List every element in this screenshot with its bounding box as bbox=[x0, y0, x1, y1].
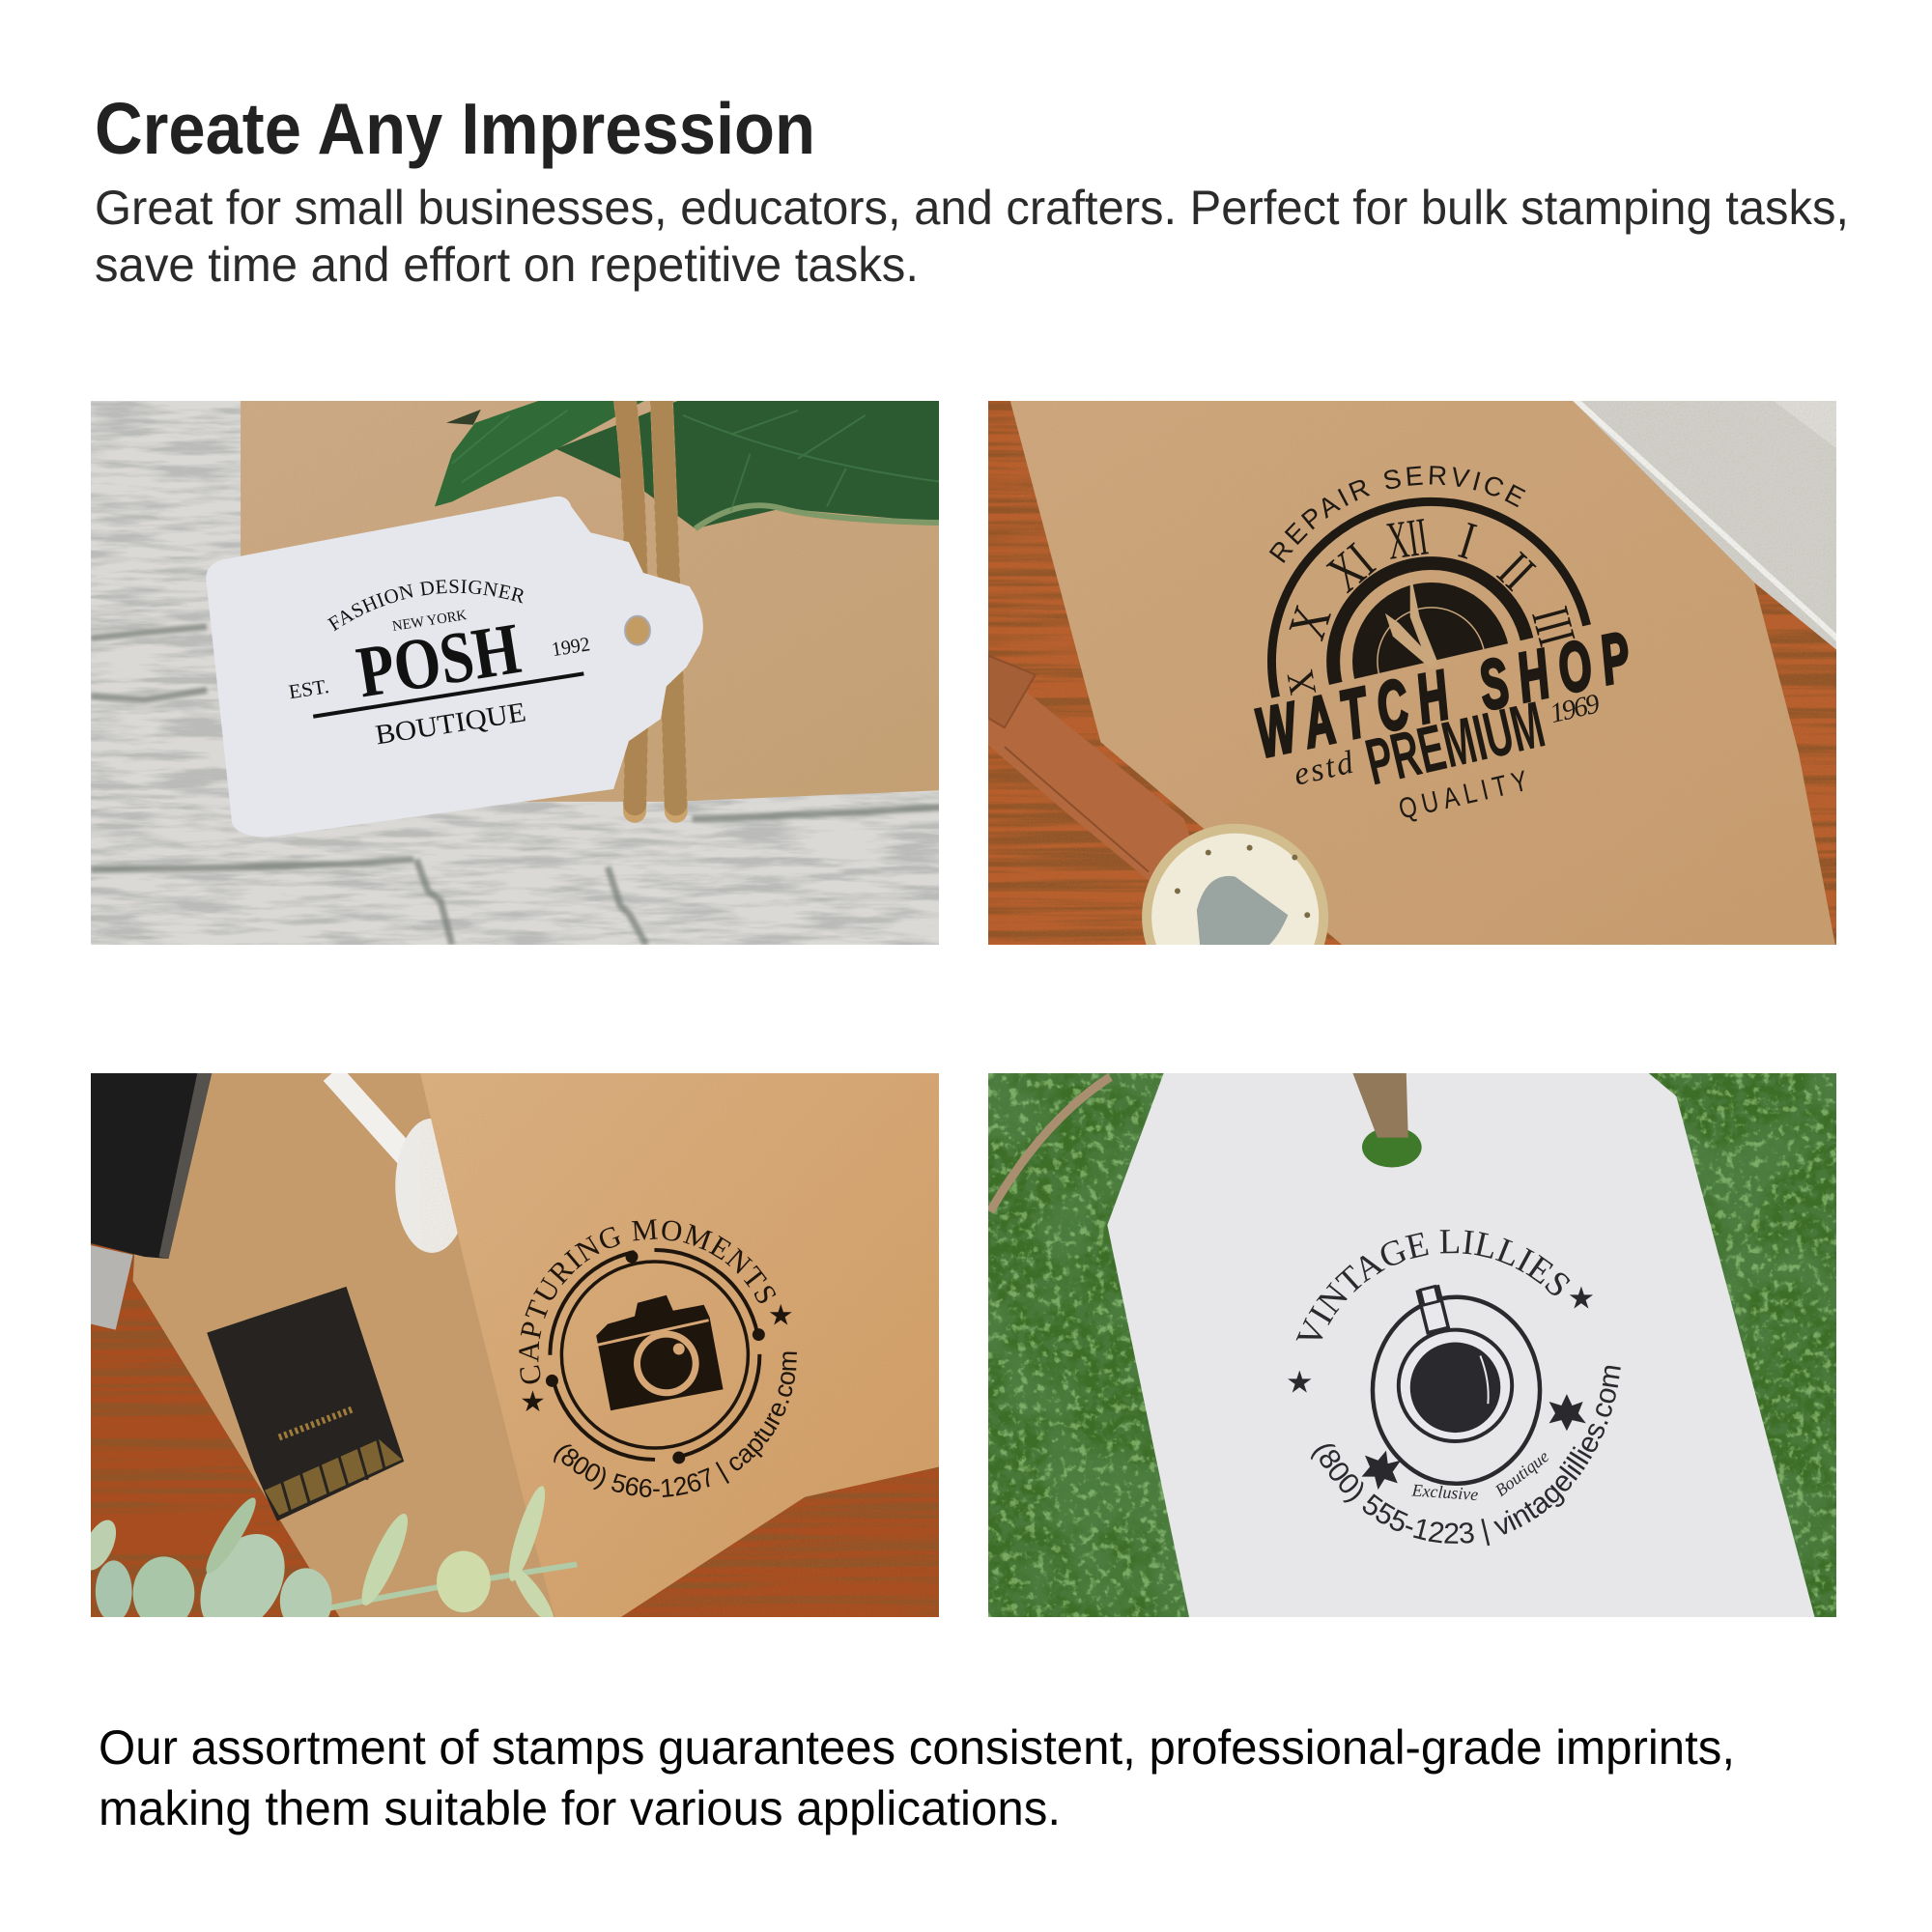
stamp: vintage lillies bbox=[1288, 1230, 1621, 1546]
stamp: posh boutique: NEW YORK bbox=[391, 608, 468, 635]
stamp: watch shop: X bbox=[1278, 667, 1324, 699]
stamp: vintage lillies: ★ bbox=[1286, 1363, 1314, 1400]
intro text: save time and effort on repetitive tasks. bbox=[95, 238, 919, 292]
stamp: capturing moments: (800) 566-1267 | capture.com bbox=[554, 1352, 797, 1497]
stamp: watch shop bbox=[1254, 466, 1629, 821]
stamp: posh boutique: 1992 bbox=[550, 632, 591, 661]
left twine bbox=[990, 1077, 1110, 1211]
panel: vintage lillies tag bbox=[988, 1073, 1836, 1617]
stamp: posh boutique: EST. bbox=[287, 674, 330, 703]
stamp: capturing moments: ★ bbox=[520, 1385, 546, 1419]
leaves bbox=[435, 401, 946, 528]
white cord and disc bbox=[332, 1073, 409, 1159]
tag hole and string bbox=[1362, 1127, 1422, 1167]
stamp: watch shop: 1969 bbox=[1547, 688, 1603, 729]
eucalyptus leaves bbox=[91, 1486, 578, 1617]
black device bbox=[91, 1073, 212, 1259]
lily flowers bbox=[1362, 1394, 1586, 1490]
panel: capturing moments envelope bbox=[91, 1073, 939, 1617]
stamp: watch shop: QUALITY bbox=[1396, 763, 1536, 825]
stamp: watch shop: XI bbox=[1317, 532, 1386, 604]
stamp: watch shop: WATCH SHOP bbox=[1249, 615, 1647, 772]
watch strap bbox=[988, 692, 1190, 881]
kraft parcel bbox=[241, 401, 946, 802]
stamp: posh boutique: FASHION DESIGNER bbox=[327, 580, 524, 632]
stamp: capturing moments: ★ bbox=[768, 1299, 794, 1333]
panel: posh boutique tag bbox=[91, 401, 939, 945]
stamp: watch shop: PREMIUM bbox=[1359, 689, 1551, 800]
stamp: watch shop: estd bbox=[1291, 745, 1356, 793]
stamp: vintage lillies: ★ bbox=[1568, 1280, 1595, 1317]
white paper tag bbox=[1107, 1072, 1816, 1621]
stamp: vintage lillies: Exclusive bbox=[1410, 1480, 1479, 1504]
stamp: watch shop: I bbox=[1453, 511, 1482, 572]
stamp: watch shop: II bbox=[1487, 541, 1546, 602]
panel: watch shop kraft bag bbox=[988, 401, 1836, 945]
stamp: capturing moments: CAPTURING MOMENTS bbox=[519, 1219, 777, 1383]
stamp: watch shop: III bbox=[1520, 601, 1587, 652]
stamp: posh boutique: POSH bbox=[352, 609, 526, 713]
stamp: vintage lillies: (800) 555-1223 | vintagelillies.com bbox=[1310, 1366, 1621, 1546]
stamp: posh boutique bbox=[288, 580, 589, 744]
white tag bbox=[206, 497, 703, 838]
front envelope bbox=[420, 1073, 946, 1620]
stamp: vintage lillies: Boutique bbox=[1492, 1446, 1552, 1500]
stamp: watch shop: REPAIR SERVICE bbox=[1269, 466, 1526, 563]
camera icon bbox=[596, 1295, 724, 1410]
watch bbox=[1142, 823, 1329, 945]
closing text: making them suitable for various applications. bbox=[99, 1781, 1061, 1835]
stamp: posh boutique: BOUTIQUE bbox=[373, 696, 528, 751]
tablet bbox=[1573, 401, 1843, 656]
title: Create Any Impression bbox=[95, 88, 815, 169]
twine bbox=[625, 401, 676, 811]
stamp: capturing moments bbox=[519, 1219, 797, 1497]
intro text bbox=[95, 181, 1849, 292]
closing text bbox=[99, 1720, 1735, 1835]
kraft bag bbox=[1010, 401, 1836, 949]
stamp: vintage lillies: VINTAGE LILLIES bbox=[1296, 1230, 1571, 1341]
stamp: watch shop: X bbox=[1277, 599, 1344, 646]
back envelope bbox=[133, 1073, 554, 1617]
intro text: Great for small businesses, educators, and crafters. Perfect for bulk stamping tasks, bbox=[95, 181, 1849, 235]
stamp: watch shop: XII bbox=[1383, 506, 1432, 572]
sd card bbox=[207, 1287, 404, 1521]
closing text: Our assortment of stamps guarantees consistent, professional-grade imprints, bbox=[99, 1720, 1735, 1775]
